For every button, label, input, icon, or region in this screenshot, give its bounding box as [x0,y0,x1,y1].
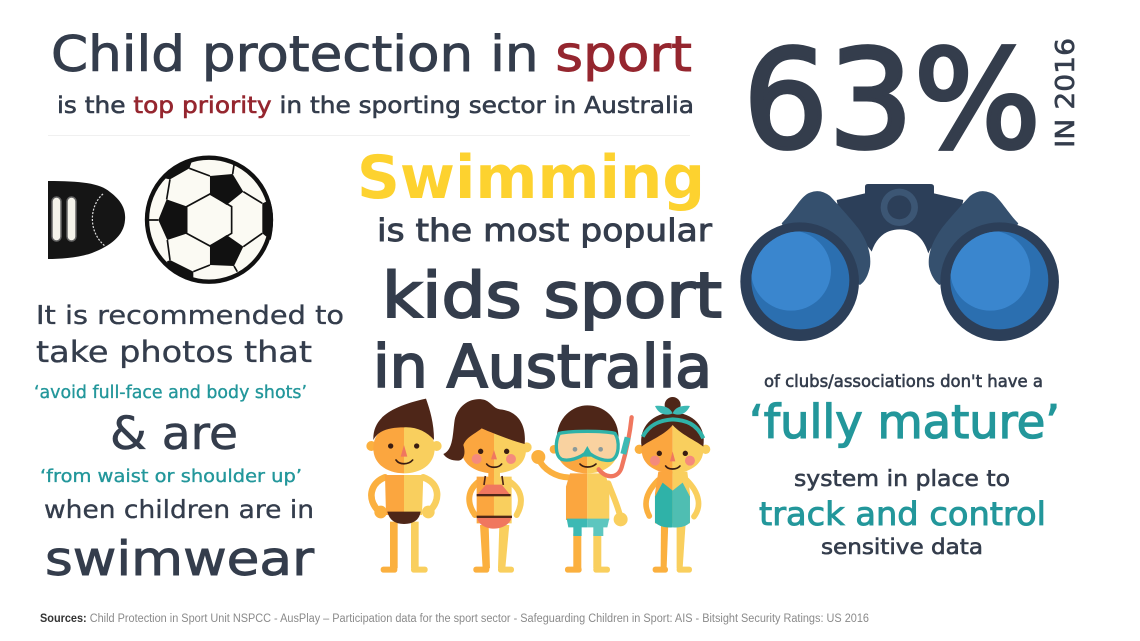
text block: photo recommendation: when children are in [44,495,314,524]
text block: fully mature system: track and control [759,495,1046,533]
illustration: four children in swimwear [366,397,710,573]
statistic: 63% in 2016: IN 2016 [1051,38,1081,148]
text block: fully mature system: system in place to [794,467,1010,492]
sources footer: Sources: Child Protection in Sport Unit NSPCC - AusPlay – Participation data for the sport sector - Safeguarding Children in Sport: AIS - Bitsight Security Ratings: US 2016 [40,613,869,625]
text block: photo recommendation: It is recommended to [36,301,344,331]
text block: swimming [357,143,722,401]
text block: swimming: Swimming [357,143,705,213]
statistic: 63% in 2016: 63% [743,22,1041,180]
text block: fully mature system: of clubs/associations don't have a [764,372,1043,392]
text block: swimming: is the most popular [377,213,712,249]
text block: fully mature system: sensitive data [821,535,983,559]
icon: shoe [48,181,125,259]
text block: photo recommendation [34,301,344,587]
text block: photo recommendation: & are [110,407,238,460]
text block: swimming: kids sport [382,259,722,332]
text block: photo recommendation: ‘from waist or shoulder up’ [40,466,302,487]
child: boy with goggles and snorkel [531,405,632,573]
child: girl in bikini [443,399,532,573]
icon: binoculars [740,184,1059,341]
text block: swimming: in Australia [373,332,712,401]
text block: photo recommendation: swimwear [45,532,315,587]
child: boy in brown trunks [366,399,442,573]
text block: photo recommendation: take photos that [36,335,312,369]
text block: fully mature system [749,372,1060,559]
child: girl in teal swimsuit [635,397,710,573]
title [51,26,694,119]
text block: fully mature system: ‘fully mature’ [749,395,1060,449]
text block: photo recommendation: ‘avoid full-face and body shots’ [34,382,307,403]
title: is the top priority in the sporting sector in Australia [57,93,694,119]
icon: soccer ball [147,158,273,282]
title: Child protection in sport [51,26,692,83]
